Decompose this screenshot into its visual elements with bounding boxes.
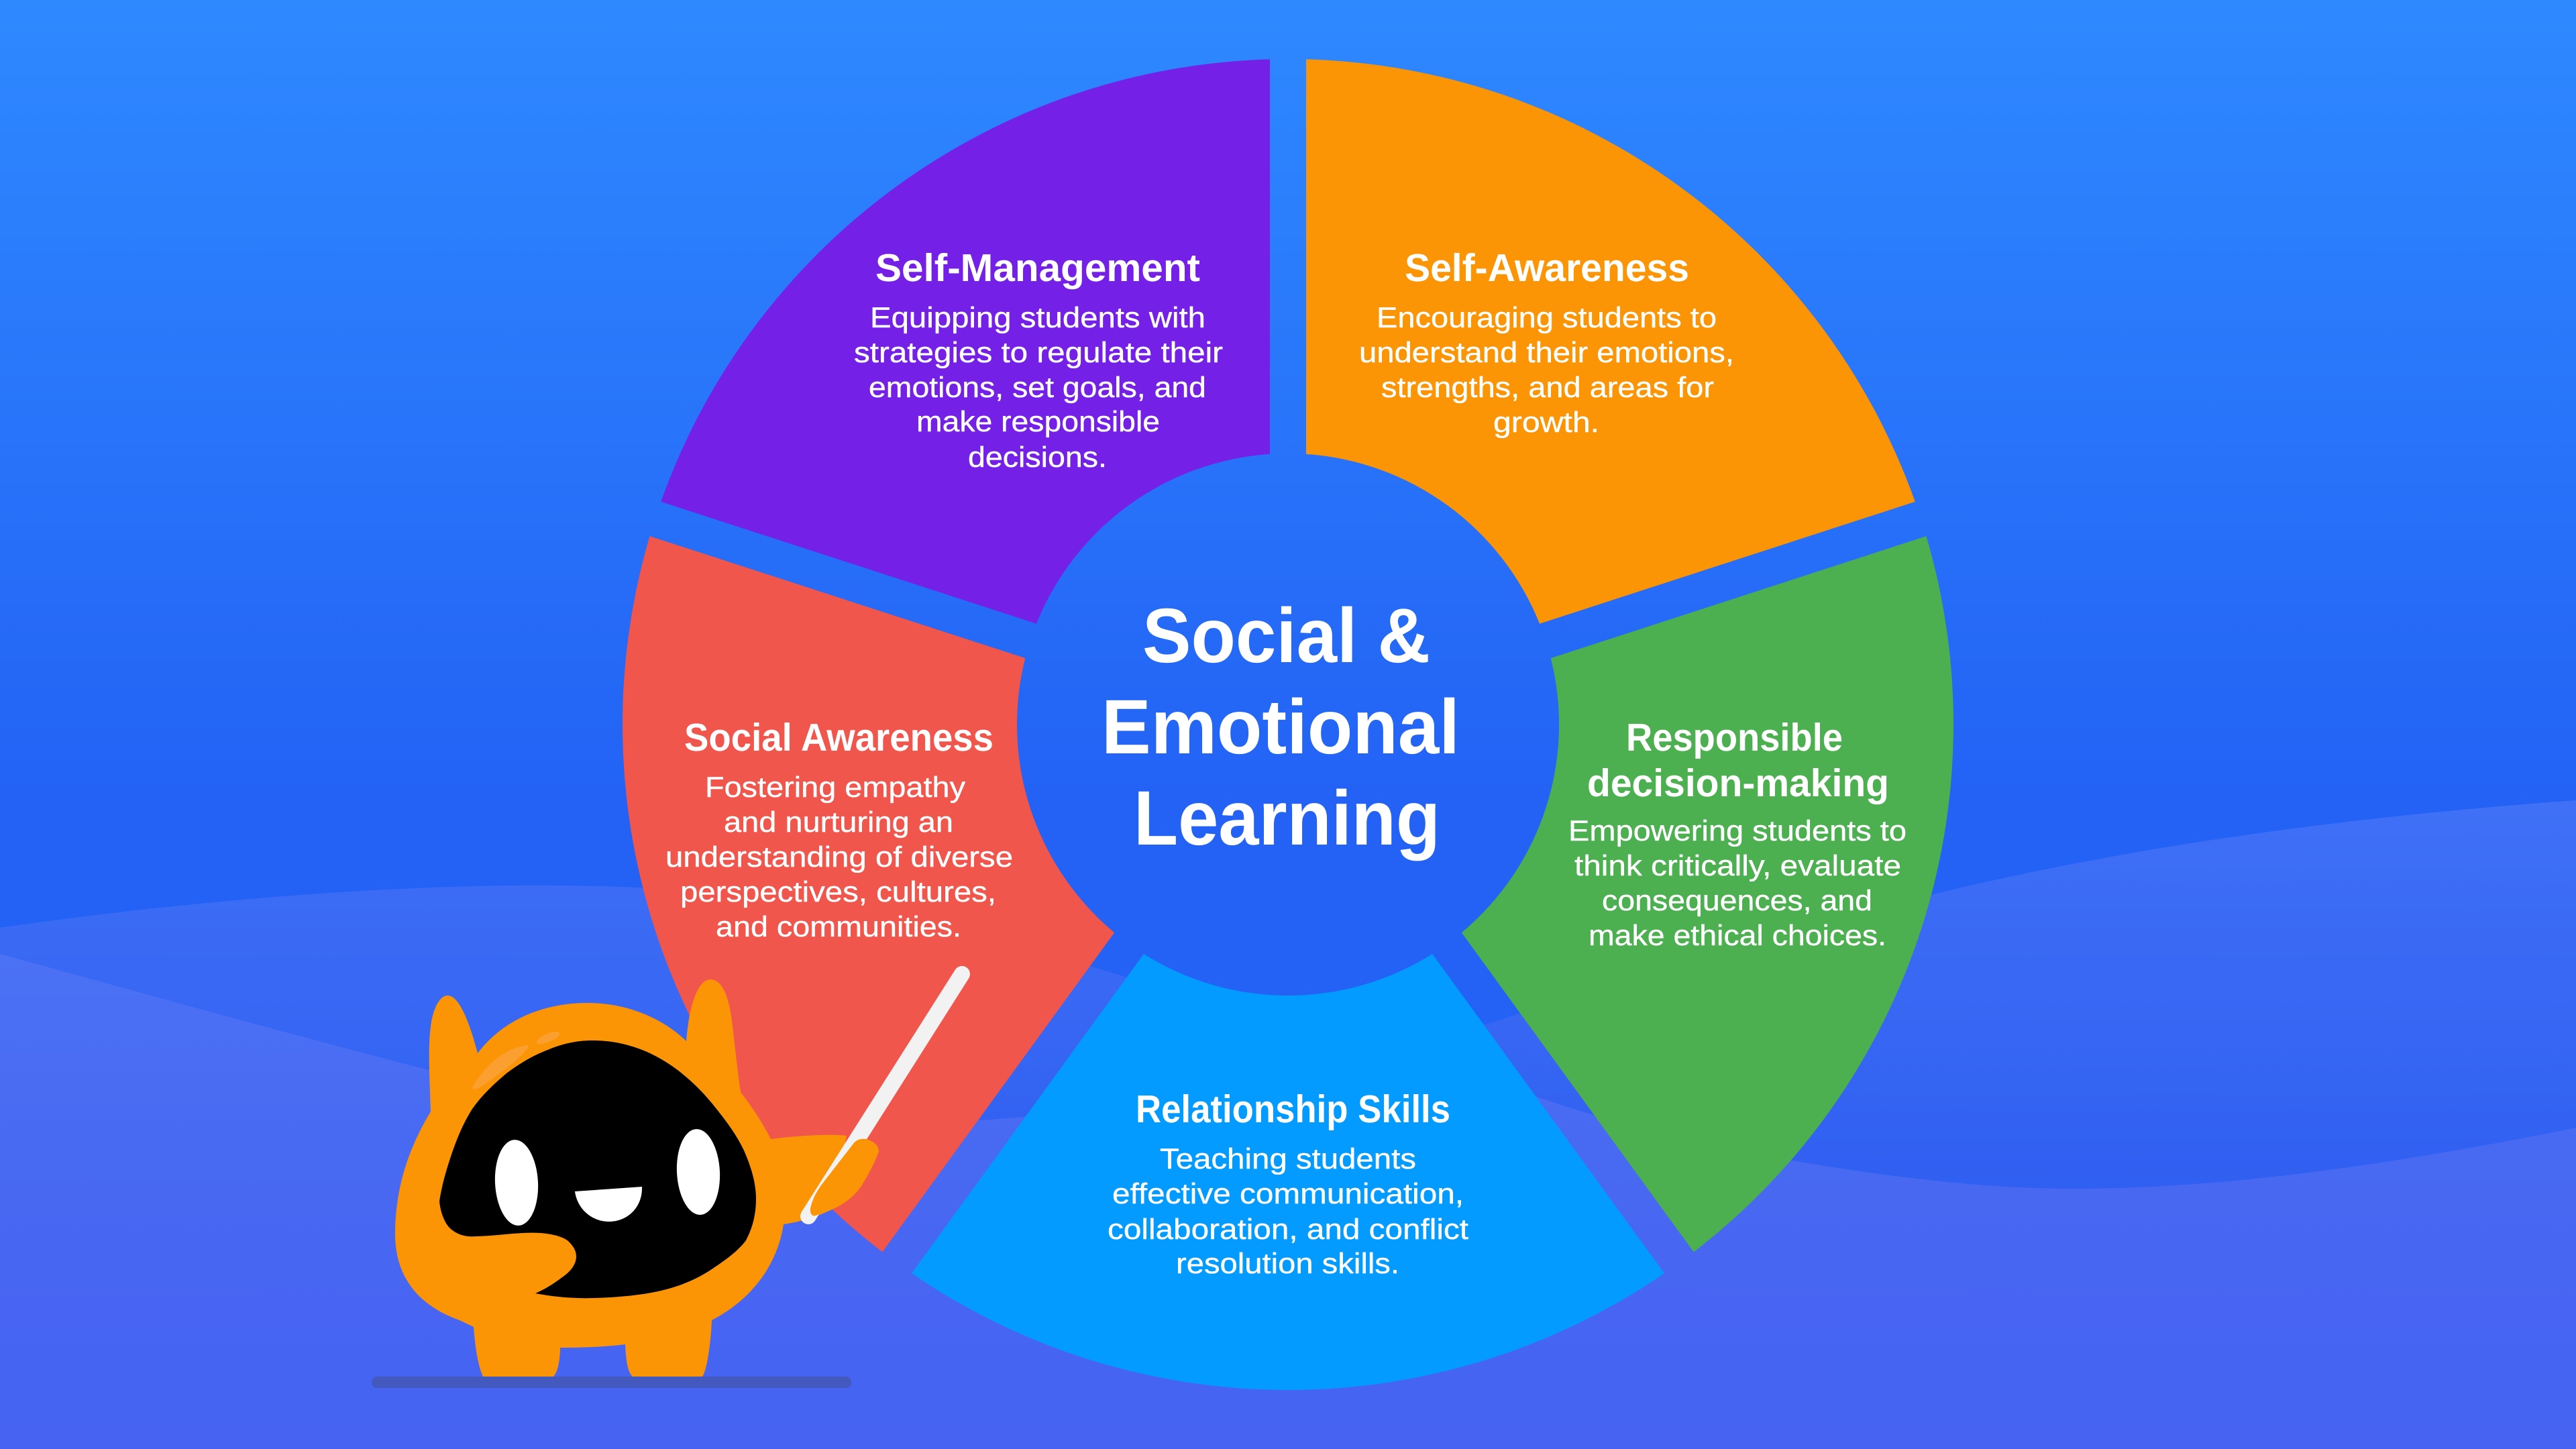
pointer stick xyxy=(808,974,962,1216)
title: Social & Emotional Learning: Social & xyxy=(1142,593,1430,679)
text: Self-Management description: decisions. xyxy=(968,441,1107,474)
text: Self-Awareness description xyxy=(1359,302,1734,439)
title: Social & Emotional Learning xyxy=(1102,593,1460,861)
segment: purple wedge xyxy=(661,59,1270,624)
text: decision-making description: think critically, evaluate xyxy=(1574,850,1901,882)
text: Social Awareness description: and communities. xyxy=(716,911,961,943)
text: decision-making description xyxy=(1568,815,1907,952)
heading: Social Awareness: Social Awareness xyxy=(684,716,994,759)
text: Relationship Skills description: Teaching students xyxy=(1160,1143,1416,1175)
background wave: front xyxy=(0,954,2576,1449)
text: Social Awareness description: Fostering empathy xyxy=(705,771,966,804)
mascot body with ears, arm and legs xyxy=(395,979,847,1377)
text: decision-making description: Empowering students to xyxy=(1568,815,1907,847)
text: Relationship Skills description: resolution skills. xyxy=(1176,1248,1399,1280)
heading: Responsible decision-making: Responsible xyxy=(1626,716,1843,759)
mascot ground shadow xyxy=(372,1377,851,1388)
heading: Self-Awareness: Self-Awareness xyxy=(1405,246,1689,290)
panel: Responsible decision-making xyxy=(1462,536,1953,1252)
text: Self-Awareness description: growth. xyxy=(1493,407,1599,439)
background wave: back xyxy=(0,800,2576,1449)
mascot finger holding the stick xyxy=(810,1139,879,1216)
segment: orange wedge xyxy=(1306,59,1915,624)
panel: Self-Awareness xyxy=(1306,59,1915,624)
text: Social Awareness description: and nurturing an xyxy=(724,806,953,839)
text: Relationship Skills description: effective communication, xyxy=(1112,1178,1464,1210)
panel: Self-Management xyxy=(661,59,1270,624)
mascot head highlight xyxy=(472,1032,559,1089)
mascot right eye xyxy=(675,1128,722,1216)
segment: red wedge xyxy=(623,536,1114,1252)
mascot left eye xyxy=(493,1138,540,1227)
text: Social Awareness description: understanding of diverse xyxy=(665,841,1013,873)
heading: Self-Management: Self-Management xyxy=(875,246,1200,290)
text: Self-Awareness description: understand their emotions, xyxy=(1359,337,1734,369)
title: Social & Emotional Learning: Learning xyxy=(1134,775,1440,861)
text: Relationship Skills description: collaboration, and conflict xyxy=(1108,1214,1468,1246)
title: Social & Emotional Learning: Emotional xyxy=(1102,684,1460,770)
heading: Responsible decision-making xyxy=(1587,716,1889,805)
text: Social Awareness description xyxy=(665,771,1013,943)
text: Social Awareness description: perspectives, cultures, xyxy=(680,876,996,908)
mascot face xyxy=(439,1040,756,1298)
text: Self-Management description: make responsible xyxy=(916,406,1160,438)
heading: Relationship Skills: Relationship Skills xyxy=(1136,1087,1450,1131)
mascot mouth xyxy=(575,1187,642,1222)
mascot: orange character pointing with a stick xyxy=(372,974,962,1388)
text: decision-making description: make ethical choices. xyxy=(1589,920,1886,952)
text: decision-making description: consequences, and xyxy=(1602,885,1872,917)
text: Self-Management description: Equipping students with xyxy=(870,302,1205,334)
panel: Social Awareness xyxy=(623,536,1114,1252)
text: Relationship Skills description xyxy=(1108,1143,1468,1280)
text: Self-Management description: emotions, set goals, and xyxy=(869,372,1206,404)
heading: Responsible decision-making: decision-making xyxy=(1587,761,1889,805)
text: Self-Management description: strategies to regulate their xyxy=(854,337,1223,369)
text: Self-Awareness description: Encouraging students to xyxy=(1377,302,1717,334)
segment: green wedge xyxy=(1462,536,1953,1252)
panel: Relationship Skills xyxy=(912,954,1664,1390)
text: Self-Management description xyxy=(854,302,1223,474)
text: Self-Awareness description: strengths, and areas for xyxy=(1381,372,1714,404)
segment: blue wedge xyxy=(912,954,1664,1390)
